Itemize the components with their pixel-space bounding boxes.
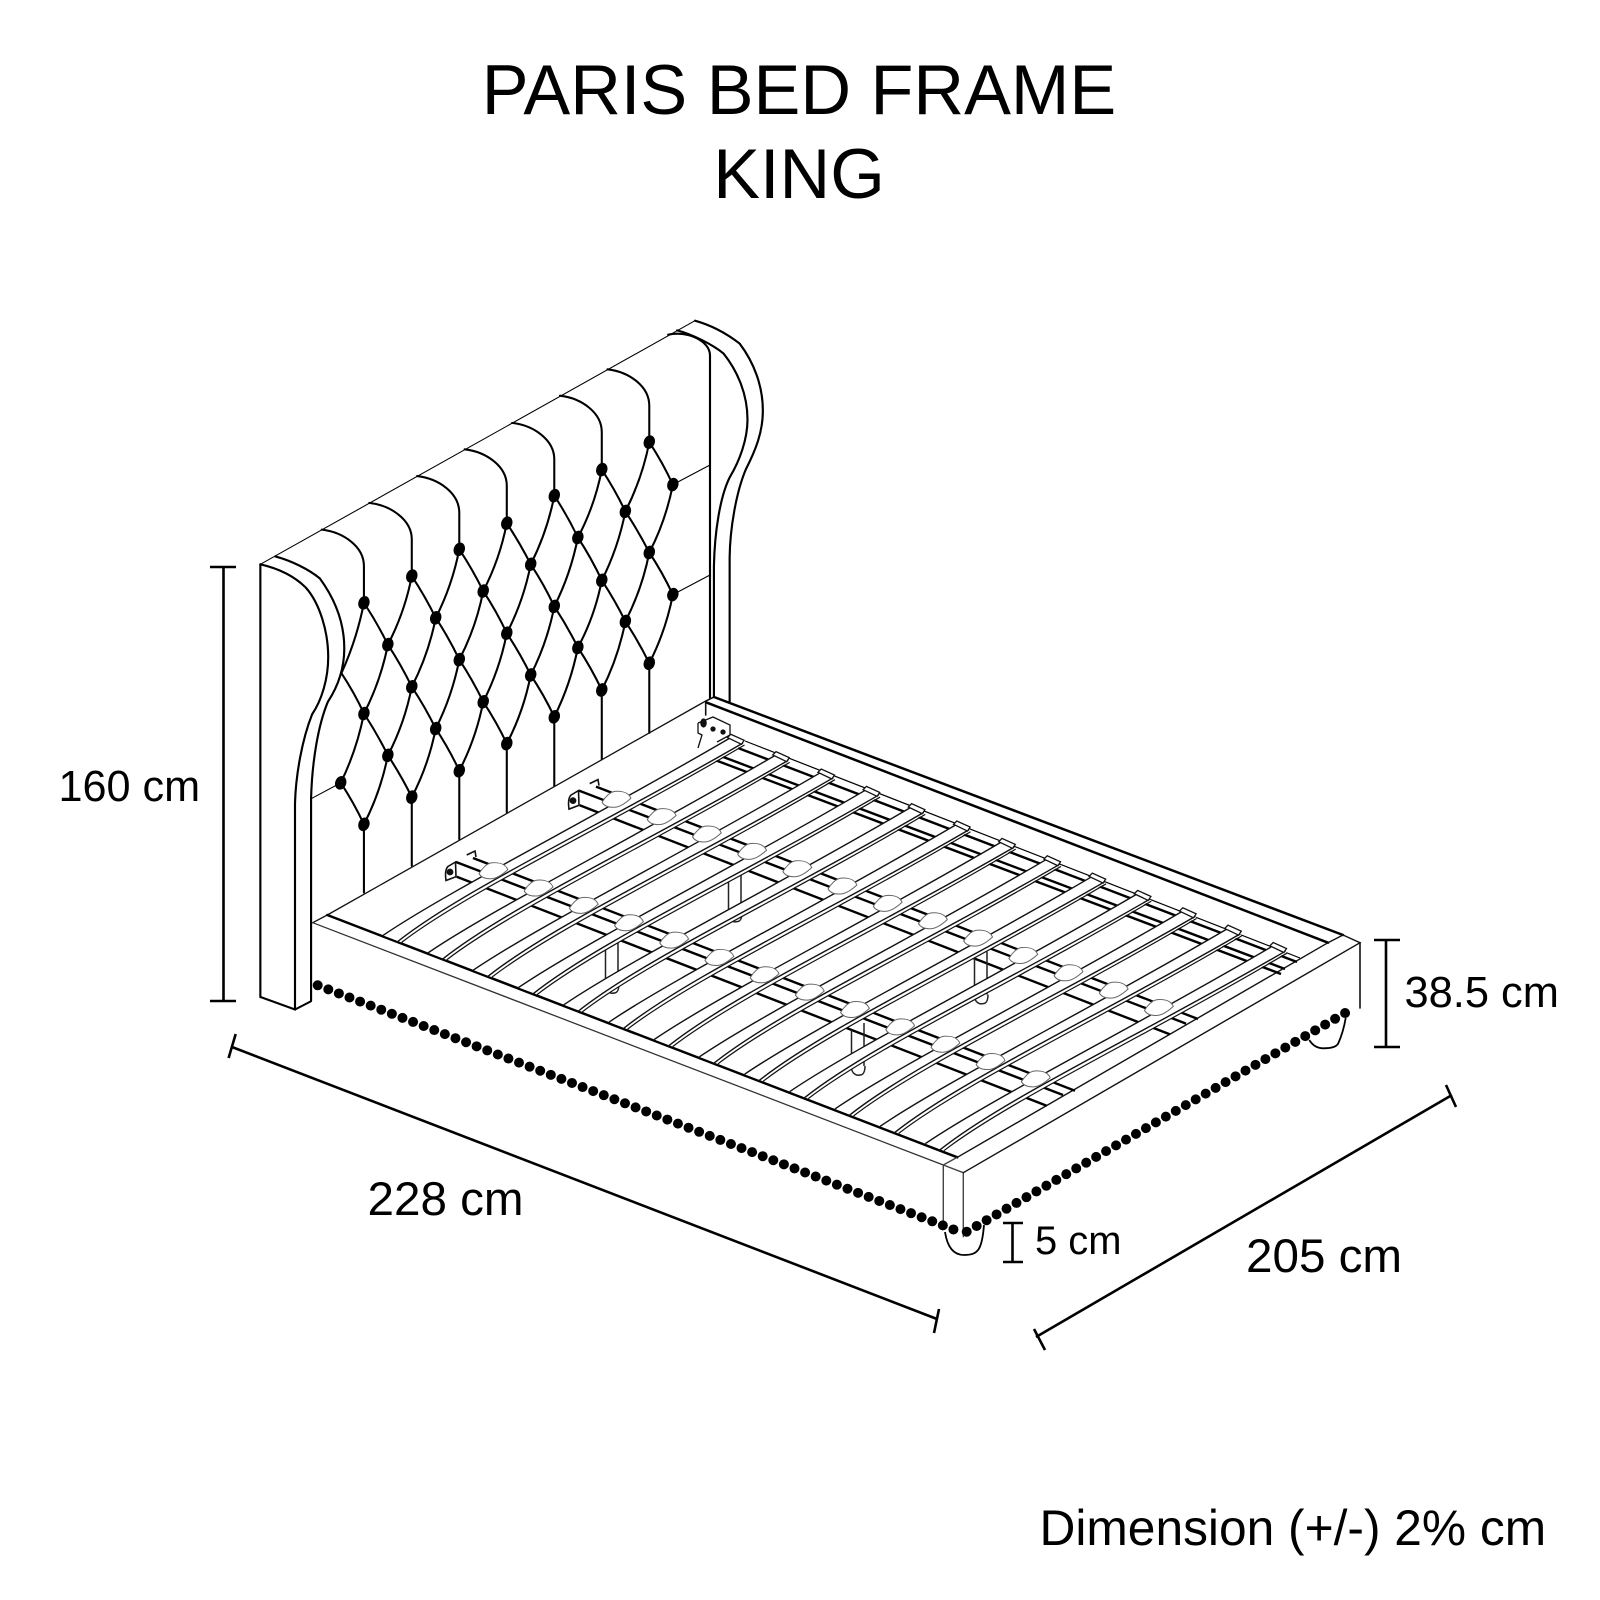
dimension: height 160 cm: 160 cm (58, 763, 200, 811)
back rail (707, 697, 1343, 943)
bar row 2 (579, 787, 1198, 1034)
support legs (606, 870, 988, 1075)
subtitle: size: KING (713, 134, 885, 213)
slats (383, 734, 1287, 1151)
dimension: width 205 cm (1034, 1085, 1456, 1350)
tufting channels (322, 369, 649, 892)
dimension: length 228 cm: 228 cm (368, 1173, 524, 1226)
dimension: base height 38.5 cm: 38.5 cm (1404, 969, 1559, 1017)
bar row 3 (715, 748, 1297, 974)
wing base (260, 997, 312, 1010)
bed frame base (313, 697, 1360, 1237)
thin seam lines (312, 465, 710, 798)
feet (945, 1018, 1346, 1255)
tufting buttons (333, 434, 680, 833)
left wing (260, 556, 344, 1010)
headboard top edge (260, 321, 695, 564)
head corner (706, 697, 714, 715)
tab rail thin line (745, 741, 1300, 958)
dimension: base height 38.5 cm (1374, 940, 1559, 1047)
seat back line (313, 701, 706, 923)
mounting brackets (446, 717, 730, 880)
headboard (260, 321, 763, 1010)
bar row 1 (456, 858, 1075, 1106)
nailhead studs, long side (318, 985, 957, 1231)
tolerance note: Dimension (+/-) 2% cm (1040, 1500, 1546, 1556)
right wing (668, 321, 763, 702)
corner pieces (943, 1157, 963, 1237)
head corner bracket (698, 717, 730, 748)
right side rail (957, 935, 1360, 1173)
dimension: width 205 cm: 205 cm (1246, 1230, 1402, 1283)
title: PARIS BED FRAME (482, 50, 1116, 129)
dimension: length 228 cm (229, 1034, 939, 1333)
front long rail (327, 915, 957, 1157)
dimension: height 160 cm (58, 567, 236, 1001)
right end vertical (1359, 943, 1361, 1008)
diamond tufting lines (341, 442, 673, 824)
nailhead studs, short side (967, 1008, 1353, 1232)
dimension: leg 5 cm: 5 cm (1035, 1219, 1121, 1263)
cross bars (456, 741, 1300, 1106)
front top edge (313, 923, 943, 1165)
